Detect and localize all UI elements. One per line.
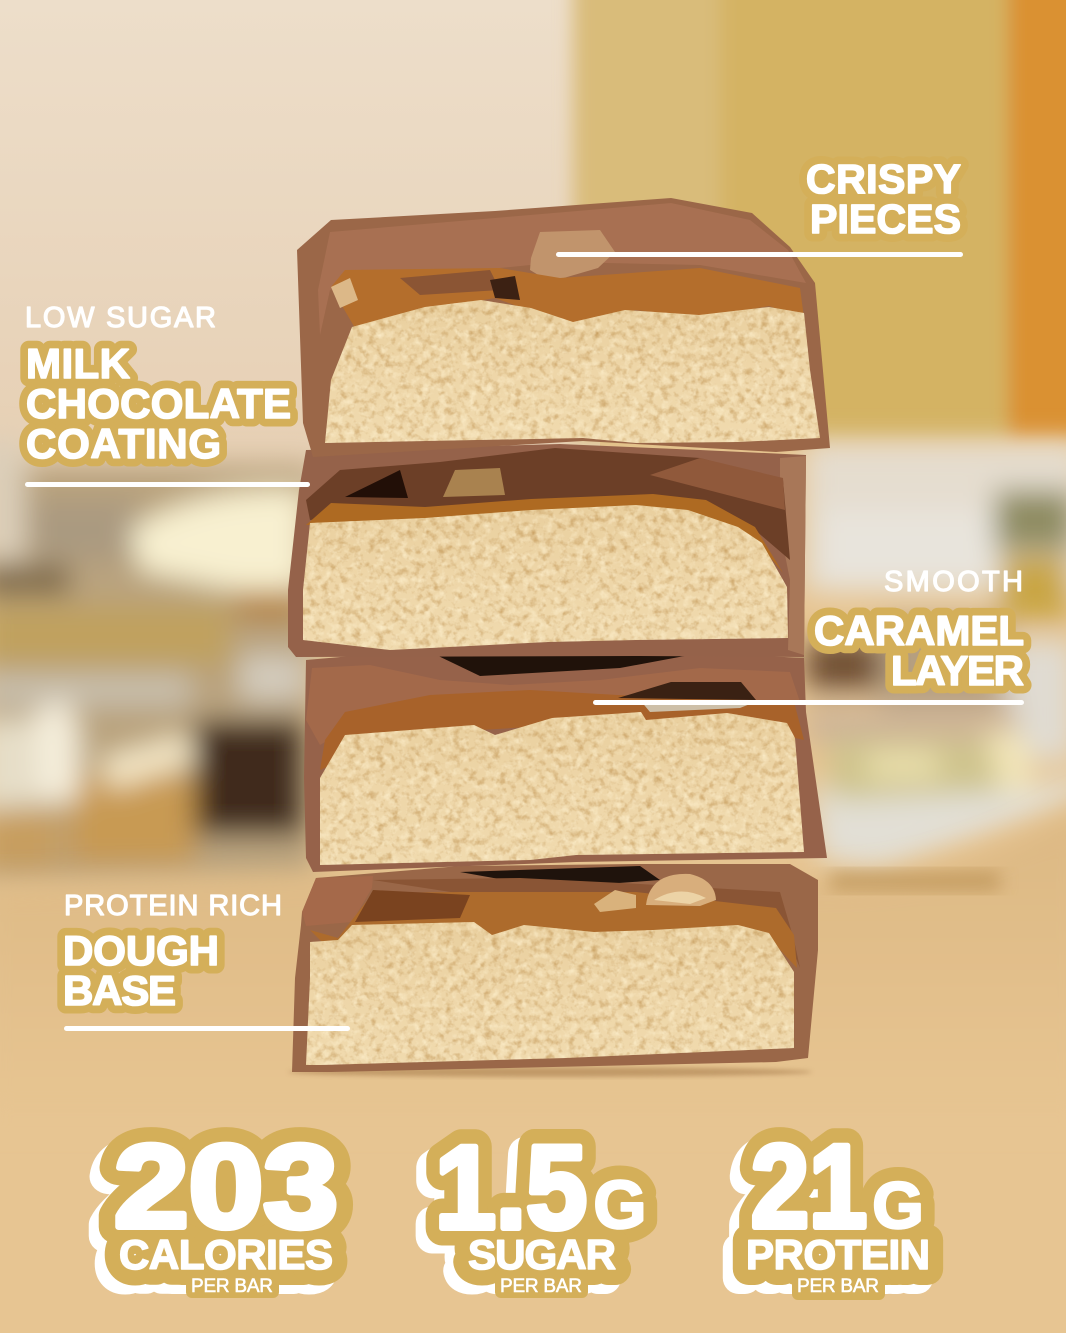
heading: dough base [63, 927, 219, 1014]
background: table edge [0, 800, 1066, 1120]
gold outline [435, 1122, 646, 1278]
gold outline: CALORIES [119, 1231, 333, 1278]
heading: caramel layer: LAYER [891, 647, 1024, 694]
leader line [593, 700, 1024, 705]
label: per bar: PER BAR [191, 1276, 273, 1297]
label: protein rich: PROTEIN RICH [64, 890, 282, 922]
heading: caramel layer: LAYER [891, 647, 1024, 694]
label: low sugar: LOW SUGAR [25, 302, 216, 334]
background: right foil wrappers [805, 442, 1066, 870]
heading: milk chocolate coating: MILK [26, 340, 130, 387]
callout: crispy pieces [556, 156, 963, 257]
heading: crispy pieces: CRISPY [806, 156, 961, 202]
heading: milk chocolate coating [26, 340, 291, 467]
heading: dough base: BASE [63, 967, 176, 1014]
white offset outline: 1.5 [425, 1130, 577, 1262]
white offset outline: 203 [104, 1130, 328, 1262]
gold outline: SUGAR [468, 1231, 616, 1278]
bar stack [288, 198, 830, 1077]
label: calories: CALORIES [119, 1231, 333, 1278]
second bar [288, 444, 806, 657]
white offset outline: SUGAR [458, 1240, 606, 1287]
number: 1.5g: 1.5 [435, 1122, 587, 1254]
callout: milk chocolate coating [25, 302, 310, 487]
heading: milk chocolate coating: CHOCOLATE [26, 380, 291, 427]
stat: 21g protein [736, 1121, 930, 1300]
white offset outline: 21 [741, 1130, 857, 1262]
number: 21g: G [872, 1168, 924, 1242]
stat: 1.5g sugar [425, 1122, 646, 1298]
callout: caramel layer [593, 566, 1024, 705]
heading: milk chocolate coating: COATING [26, 420, 221, 467]
leader line [25, 482, 310, 487]
white offset outline: CALORIES [109, 1240, 323, 1287]
white offset outline [736, 1130, 920, 1287]
heading: dough base: DOUGH [63, 927, 219, 974]
label: protein: PROTEIN [746, 1231, 930, 1278]
gold outline [746, 1121, 930, 1278]
per bar tab [186, 1270, 279, 1298]
number: 1.5g: G [594, 1167, 646, 1243]
heading: crispy pieces [806, 156, 961, 242]
number: 203: 203 [114, 1121, 338, 1253]
leader line [64, 1026, 350, 1031]
background: bottle and orange jar [573, 0, 1066, 440]
heading: milk chocolate coating: CHOCOLATE [26, 380, 291, 427]
heading: milk chocolate coating: COATING [26, 420, 221, 467]
heading: crispy pieces: PIECES [810, 196, 961, 242]
gold outline: 21 [751, 1121, 867, 1253]
stat: 203 calories [104, 1121, 338, 1298]
label: per bar: PER BAR [500, 1276, 582, 1297]
per bar tab [792, 1270, 885, 1300]
gold outline: G [594, 1167, 646, 1243]
gold outline: PROTEIN [746, 1231, 930, 1278]
shadow under stack [288, 1067, 812, 1077]
heading: dough base: BASE [63, 967, 176, 1014]
third bar [304, 650, 827, 872]
heading: crispy pieces: CRISPY [806, 156, 961, 202]
gold outline: G [872, 1168, 924, 1242]
callout: dough base [63, 890, 350, 1031]
white offset outline: PROTEIN [736, 1240, 920, 1287]
gold outline: 203 [114, 1121, 338, 1253]
gold outline: 1.5 [435, 1122, 587, 1254]
heading: caramel layer [814, 607, 1024, 694]
number: 21g: 21 [751, 1121, 867, 1253]
label: sugar: SUGAR [468, 1231, 616, 1278]
top bar [297, 198, 830, 457]
heading: dough base: DOUGH [63, 927, 219, 974]
leader line [556, 252, 963, 257]
label: per bar: PER BAR [797, 1276, 879, 1297]
heading: caramel layer: CARAMEL [814, 607, 1024, 654]
heading: caramel layer: CARAMEL [814, 607, 1024, 654]
label: smooth: SMOOTH [884, 566, 1023, 598]
heading: milk chocolate coating: MILK [26, 340, 130, 387]
heading: crispy pieces: PIECES [810, 196, 961, 242]
bottom bar [292, 864, 818, 1072]
per bar tab [495, 1270, 588, 1298]
background: left foil wrappers [0, 440, 315, 885]
